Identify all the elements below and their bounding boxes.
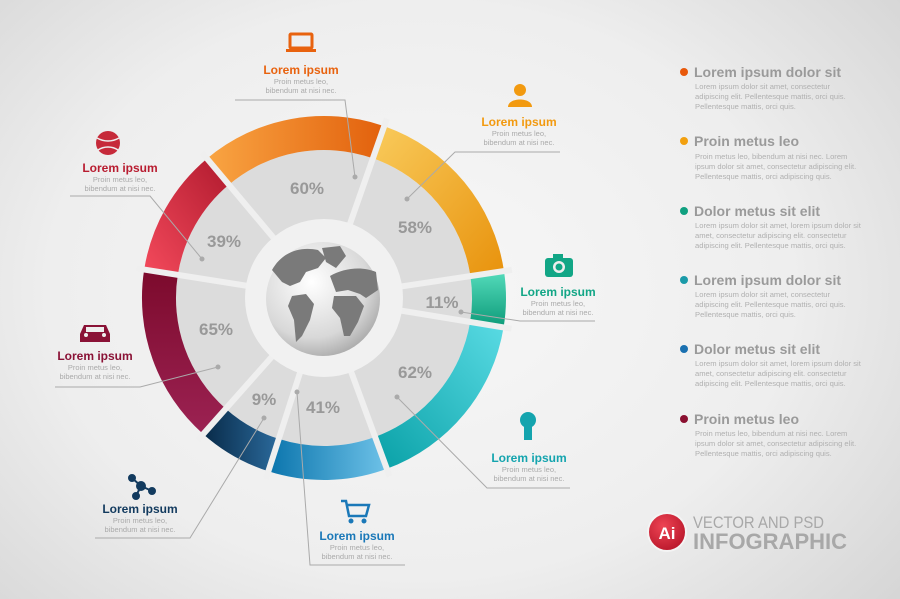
text: bibendum at nisi nec. [484,138,554,147]
legend list: Lorem ipsum dolor sit [694,272,841,288]
legend list: Dolor metus sit elit [694,341,820,357]
percentage labels: 11% [425,293,459,312]
legend list: amet, consectetur adipiscing elit. consectetur [695,231,847,240]
legend list: Dolor metus sit elit [694,203,820,219]
callout labels: Lorem ipsum [319,529,395,543]
icon: camera [545,254,573,277]
legend list: Lorem ipsum dolor sit amet, consectetur [695,290,831,299]
callout labels: Lorem ipsum [57,349,133,363]
text: Proin metus leo, [113,516,167,525]
legend list: Lorem ipsum dolor sit amet, lorem ipsum dolor sit [695,359,862,368]
legend list: ipsum dolor sit amet, consectetur adipiscing elit. [695,162,856,171]
legend list: adipiscing elit. Pellentesque mattis, orci quis. [695,241,846,250]
text: Proin metus leo, [502,465,556,474]
percentage labels: 58% [398,218,432,237]
callout labels: Lorem ipsum [82,161,158,175]
percentage labels: 41% [306,398,340,417]
icon: ball [96,131,120,155]
icon: bulb [520,412,536,440]
percentage labels: 62% [398,363,432,382]
text: bibendum at nisi nec. [523,308,593,317]
legend list: Pellentesque mattis, orci quis. [695,310,796,319]
icon: person [508,84,532,107]
text: Proin metus leo, [531,299,585,308]
percentage labels: 9% [252,390,276,409]
text: Proin metus leo, [68,363,122,372]
logo text: VECTOR AND PSD [693,513,824,532]
callout labels: Lorem ipsum [520,285,596,299]
text: bibendum at nisi nec. [105,525,175,534]
legend list: Pellentesque mattis, orci adipiscing quis. [695,449,832,458]
legend list: ipsum dolor sit amet, consectetur adipiscing elit. [695,439,856,448]
donut chart [136,116,512,480]
callout labels: Lorem ipsum [102,502,178,516]
logo: Ai badge: Ai [658,524,676,543]
callout labels [57,63,596,543]
icon: cart [341,501,369,524]
percentage labels: 60% [290,179,324,198]
percentage labels [199,179,459,417]
leader lines [55,100,595,565]
text: Proin metus leo, [492,129,546,138]
text: bibendum at nisi nec. [85,184,155,193]
callout labels: Lorem ipsum [263,63,339,77]
callout labels: Lorem ipsum [481,115,557,129]
percentage labels: 39% [207,232,241,251]
text: Proin metus leo, [274,77,328,86]
legend list: adipiscing elit. Pellentesque mattis, orci quis. [695,92,846,101]
legend list: Proin metus leo, bibendum at nisi nec. Lorem [695,429,847,438]
logo text: INFOGRAPHIC [693,529,847,554]
logo: Ai badge [648,513,686,551]
text: bibendum at nisi nec. [494,474,564,483]
legend list: adipiscing elit. Pellentesque mattis, orci quis. [695,379,846,388]
legend list: Proin metus leo, bibendum at nisi nec. Lorem [695,152,847,161]
icon: molecule [129,475,155,499]
legend list: adipiscing elit. Pellentesque mattis, orci quis. [695,300,846,309]
legend list: Proin metus leo [694,411,799,427]
legend list [680,64,862,458]
text: Proin metus leo, [330,543,384,552]
text: bibendum at nisi nec. [266,86,336,95]
legend list: Proin metus leo [694,133,799,149]
text: bibendum at nisi nec. [322,552,392,561]
callout labels: Lorem ipsum [491,451,567,465]
legend list: Lorem ipsum dolor sit [694,64,841,80]
legend list: Pellentesque mattis, orci adipiscing quis. [695,172,832,181]
percentage labels: 65% [199,320,233,339]
legend list: Lorem ipsum dolor sit amet, lorem ipsum dolor sit [695,221,862,230]
text: Proin metus leo, [93,175,147,184]
globe [266,242,380,356]
icon: laptop [286,34,316,52]
logo text [693,513,847,554]
legend list: Pellentesque mattis, orci quis. [695,102,796,111]
legend list: amet, consectetur adipiscing elit. consectetur [695,369,847,378]
icon: car [80,325,110,342]
text: bibendum at nisi nec. [60,372,130,381]
legend list: Lorem ipsum dolor sit amet, consectetur [695,82,831,91]
